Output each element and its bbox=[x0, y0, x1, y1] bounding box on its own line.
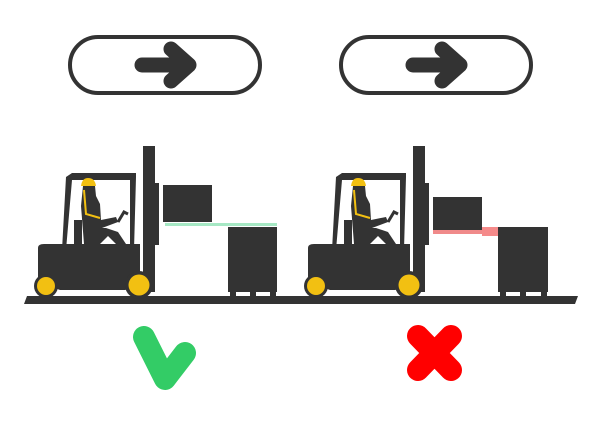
pill: right direction bbox=[341, 37, 531, 93]
red misalignment bbox=[482, 227, 499, 236]
load box right bbox=[433, 197, 482, 230]
scene: incorrect forklift bbox=[304, 146, 548, 299]
scene: correct forklift bbox=[34, 146, 277, 299]
icon: left arrow bbox=[142, 49, 189, 81]
icon: red cross bbox=[418, 336, 451, 370]
green level line bbox=[165, 223, 277, 226]
load box left bbox=[163, 185, 212, 222]
stack box left bbox=[228, 227, 277, 297]
icon: right arrow bbox=[413, 49, 460, 81]
stack box right bbox=[498, 227, 548, 297]
ground line bbox=[24, 296, 578, 304]
pill: left direction bbox=[70, 37, 260, 93]
icon: green check bbox=[144, 337, 185, 379]
